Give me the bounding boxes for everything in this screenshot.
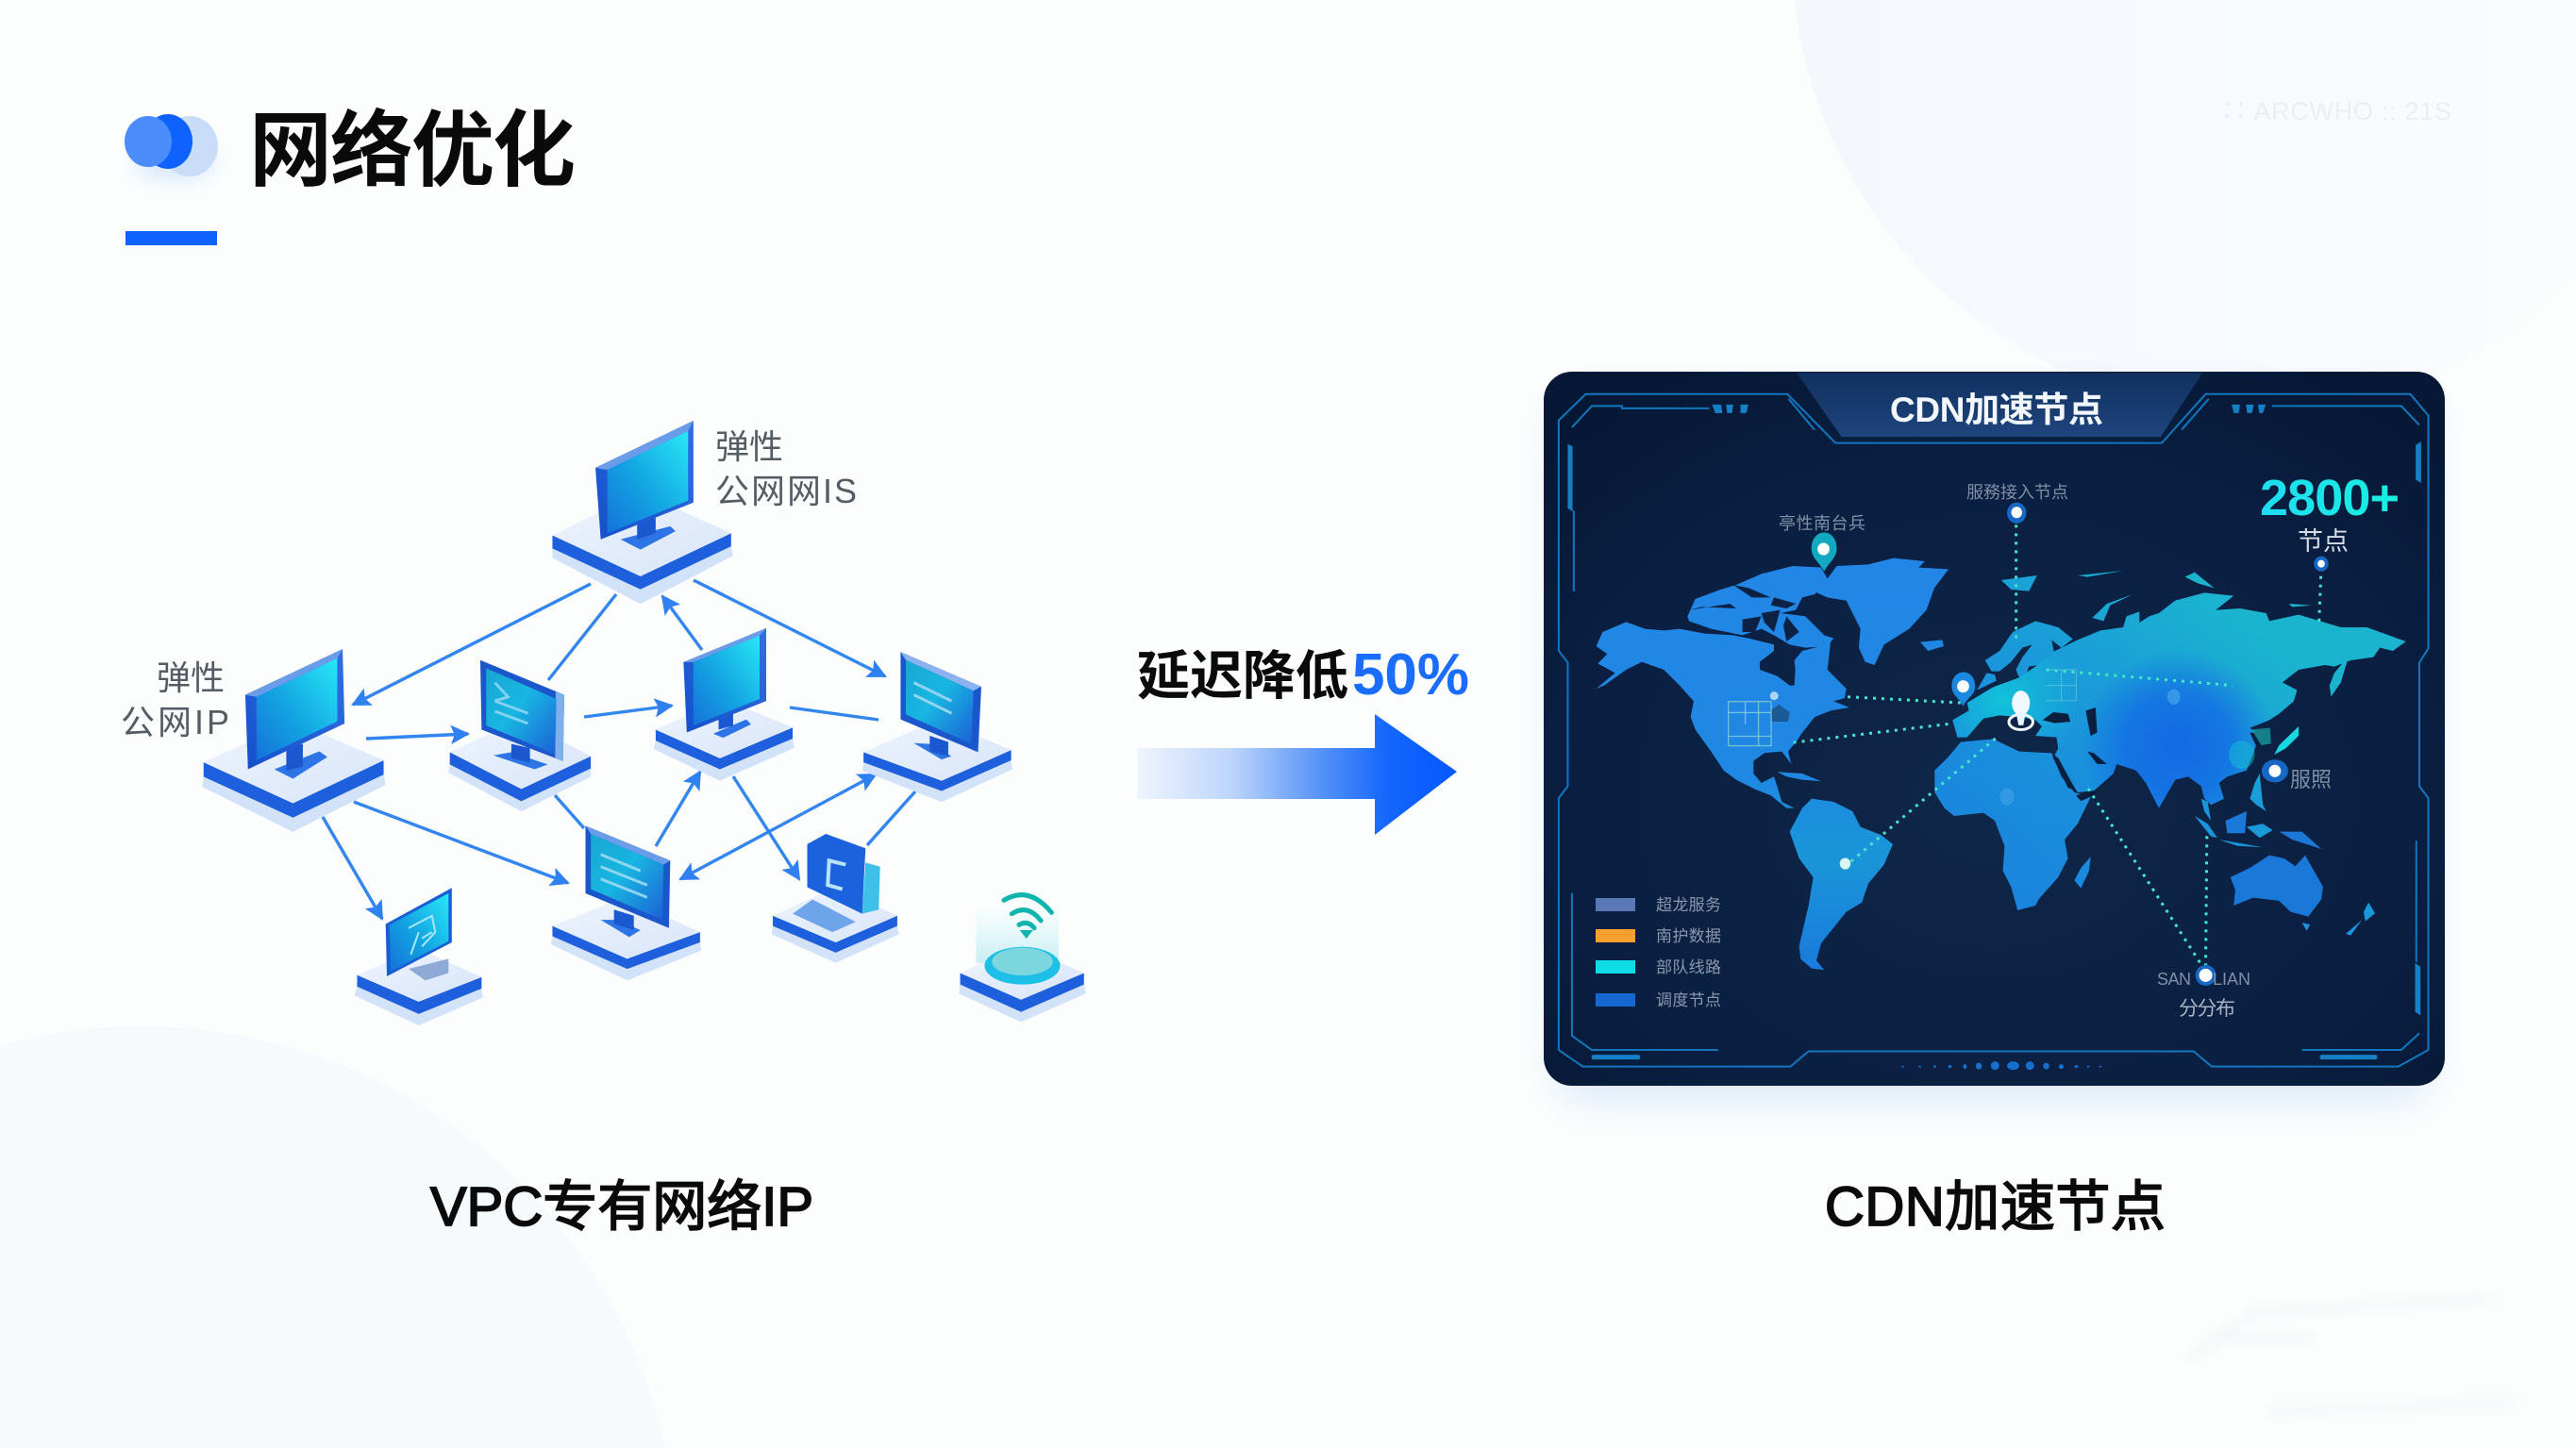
device: left monitor <box>202 649 386 832</box>
panel shadow <box>1557 396 2430 1099</box>
title text: 网络优化 <box>249 104 576 197</box>
device: right monitor <box>862 652 1012 802</box>
device: wifi beacon <box>959 895 1086 1023</box>
panel: CDN map dashboard <box>1544 372 2445 1086</box>
label: left monitor: 弹性 <box>157 658 225 697</box>
callout text: 延迟降低 <box>1137 646 1348 706</box>
map labels: 亭性南台兵 <box>1779 514 1865 533</box>
map legend <box>1596 896 1721 1009</box>
arrow <box>1137 714 1457 835</box>
stat: 2800+: 2800+ <box>2260 470 2400 526</box>
label: top monitor: 公网网IS <box>715 472 857 510</box>
device: bottom laptop and document <box>772 834 899 963</box>
background circle: bottom left <box>0 1026 665 1448</box>
map labels: SAN <box>2157 970 2191 989</box>
device: centre monitor <box>654 628 794 781</box>
map labels: 服照 <box>2290 768 2332 791</box>
label: left monitor: 公网IP <box>121 703 229 741</box>
device: second-row monitor <box>448 660 591 811</box>
world map: Eurasia, Africa and Oceania <box>1934 571 2406 936</box>
map legend: 调度节点 <box>1656 991 1721 1009</box>
caption: CDN: CDN加速节点 <box>1825 1176 2166 1238</box>
HUD accent bars <box>1567 405 2421 1059</box>
HUD bottom dots <box>1901 1061 2101 1070</box>
map pins <box>1770 503 2329 986</box>
map legend: 南护数据 <box>1656 927 1721 945</box>
connection arrows <box>323 580 915 919</box>
callout: latency reduction <box>1137 642 1469 835</box>
callout text: 50% <box>1352 642 1469 707</box>
network grid overlays <box>1729 670 2076 746</box>
label: top monitor: 弹性 <box>715 427 783 466</box>
panel title plate <box>1797 373 2202 437</box>
HUD frame lines <box>1559 394 2429 1067</box>
icon: overlapping circles <box>125 114 218 179</box>
map labels: 服務接入节点 <box>1966 483 2068 502</box>
map labels <box>1779 483 2332 1020</box>
map legend: 部队线路 <box>1656 958 1721 976</box>
faint smudge: bottom right <box>2189 1299 2516 1411</box>
panel background <box>1544 372 2445 1086</box>
map legend: 超龙服务 <box>1656 896 1721 914</box>
faint watermark text: ∷ ARCWHO :: 21S <box>2221 97 2451 125</box>
map labels: LIAN <box>2213 970 2250 989</box>
title block <box>125 104 576 245</box>
caption: VPC: VPC专有网络IP <box>430 1176 813 1238</box>
device: bottom left tablet <box>355 888 483 1025</box>
map labels: 分分布 <box>2179 998 2235 1020</box>
world map: Americas and Greenland <box>1597 558 1949 970</box>
device: top monitor <box>552 421 733 604</box>
title underline <box>125 231 217 245</box>
stat label: 节点 <box>2298 527 2349 556</box>
network diagram <box>121 421 1086 1025</box>
device: bottom centre monitor <box>551 825 701 980</box>
panel title: CDN加速节点 <box>1890 391 2103 429</box>
background circle: top right <box>1795 0 2576 410</box>
dotted connection routes <box>1794 524 2321 967</box>
